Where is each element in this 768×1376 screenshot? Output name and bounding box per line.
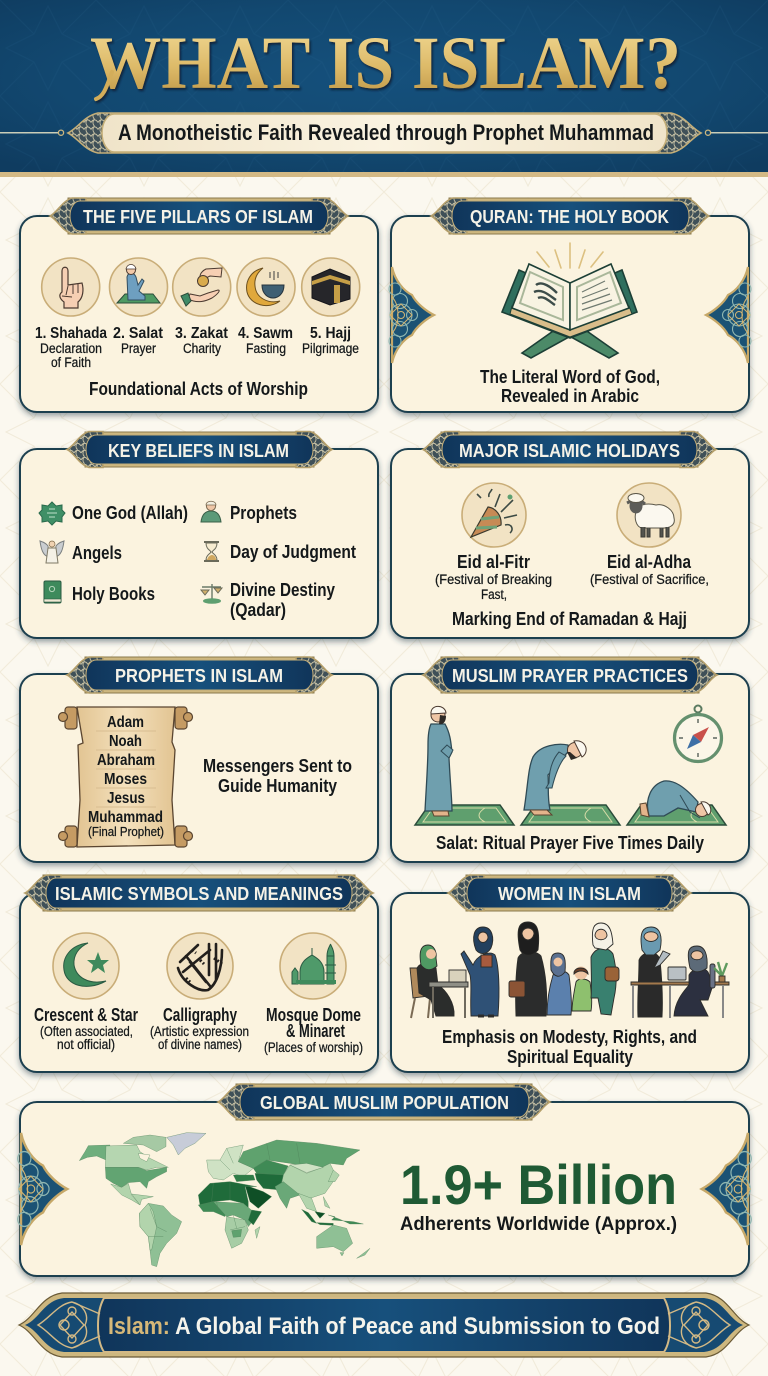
panel card <box>391 674 749 862</box>
holiday labels: Eid al-Adha <box>607 552 692 572</box>
heading: holidays <box>423 432 716 468</box>
icon: zakat hands <box>173 258 231 316</box>
icon: scales <box>201 584 222 604</box>
heading: key beliefs: KEY BELIEFS IN ISLAM <box>108 440 289 461</box>
standing teacher <box>461 927 499 1016</box>
symbol labels: Mosque Dome <box>266 1005 361 1025</box>
belief labels: (Qadar) <box>230 600 286 620</box>
scroll of prophets: Abraham <box>97 752 155 769</box>
women caption: Emphasis on Modesty, Rights, and <box>442 1027 697 1047</box>
icon: salat kneeling man <box>110 258 168 316</box>
holiday labels: (Festival of Sacrifice, <box>590 572 709 587</box>
panel: global population <box>18 1084 751 1276</box>
pillar labels: 1. Shahada <box>35 325 107 342</box>
panel: holidays <box>391 432 749 638</box>
pillar labels: 5. Hajj <box>310 325 351 342</box>
symbol labels: not official) <box>57 1037 115 1052</box>
panel: symbols <box>20 875 378 1072</box>
panel card <box>391 449 749 638</box>
population statistic: Adherents Worldwide (Approx.) <box>400 1214 677 1235</box>
prayer mats <box>415 805 726 825</box>
heading: holidays: MAJOR ISLAMIC HOLIDAYS <box>459 440 680 461</box>
icon: hourglass <box>204 542 219 561</box>
quran caption: Revealed in Arabic <box>501 386 639 406</box>
pillar labels: 2. Salat <box>113 325 164 342</box>
scroll of prophets <box>58 707 192 847</box>
symbol labels: (Often associated, <box>40 1024 133 1039</box>
woman with tablet <box>638 927 670 1017</box>
panel card <box>391 893 749 1072</box>
heading: key beliefs <box>67 432 332 468</box>
desk with seated woman <box>631 946 729 1018</box>
scroll of prophets: Moses <box>104 771 147 788</box>
icon: shahada hand <box>42 258 100 316</box>
pillar labels: Fasting <box>246 341 286 356</box>
belief labels: Divine Destiny <box>230 580 335 600</box>
pillar labels: Pilgrimage <box>302 341 359 356</box>
girl in blue <box>547 953 571 1015</box>
belief labels <box>72 503 356 620</box>
symbol labels: Crescent & Star <box>34 1005 138 1025</box>
icon: party popper <box>462 483 526 547</box>
belief labels: Day of Judgment <box>230 542 356 562</box>
belief labels: Prophets <box>230 503 297 523</box>
header band <box>0 0 768 177</box>
heading: prayer <box>423 657 717 693</box>
population statistic: 1.9+ Billion <box>400 1153 677 1216</box>
icon: hajj kaaba <box>302 258 360 316</box>
heading: population <box>218 1084 550 1120</box>
holiday labels: (Festival of Breaking <box>435 572 552 587</box>
scroll of prophets: Adam <box>107 714 144 731</box>
prophets caption: Guide Humanity <box>218 776 337 796</box>
belief labels: Holy Books <box>72 584 155 604</box>
heading: five pillars <box>50 198 348 234</box>
icon: calligraphy <box>167 933 233 999</box>
heading: women: WOMEN IN ISLAM <box>498 883 641 904</box>
pillar labels: 3. Zakat <box>175 325 229 342</box>
scroll of prophets: Noah <box>109 733 142 750</box>
panel: prophets <box>20 657 378 862</box>
panel: women in islam <box>391 875 749 1072</box>
symbol labels: & Minaret <box>286 1021 345 1041</box>
heading: prophets: PROPHETS IN ISLAM <box>115 665 283 686</box>
icon: compass <box>674 706 722 762</box>
panel card <box>20 449 378 638</box>
symbol labels: Calligraphy <box>163 1005 237 1025</box>
pillar labels: Prayer <box>121 341 156 356</box>
quran caption <box>480 367 660 406</box>
woman in black with case <box>509 922 547 1016</box>
symbol labels <box>34 1005 363 1055</box>
panel card <box>20 893 378 1072</box>
pillar labels: Charity <box>183 341 221 356</box>
holiday labels: Fast, <box>481 587 507 602</box>
small girl in green <box>572 966 592 1011</box>
belief labels: Angels <box>72 543 122 563</box>
heading: women <box>448 875 691 911</box>
panel: quran <box>389 198 751 412</box>
pillar labels <box>35 325 359 370</box>
figure: bowing <box>524 741 586 815</box>
woman in teal <box>591 923 619 1015</box>
quran caption: The Literal Word of God, <box>480 367 660 387</box>
women caption: Spiritual Equality <box>507 1047 633 1067</box>
seated scholar <box>410 945 468 1018</box>
symbol labels: (Artistic expression <box>150 1024 249 1039</box>
pillar labels: of Faith <box>51 355 91 370</box>
women caption <box>442 1027 697 1067</box>
symbol labels: (Places of worship) <box>264 1040 363 1055</box>
icon: sheep <box>617 483 681 547</box>
icon: mosque <box>280 933 346 999</box>
prayer caption: Salat: Ritual Prayer Five Times Daily <box>436 833 704 853</box>
heading: symbols <box>25 875 373 911</box>
icon: one god star <box>39 502 65 525</box>
panel card <box>20 1102 749 1276</box>
icon: open quran on stand <box>502 243 637 358</box>
heading: prayer: MUSLIM PRAYER PRACTICES <box>452 665 688 686</box>
prophets caption <box>203 756 352 796</box>
heading: population: GLOBAL MUSLIM POPULATION <box>260 1092 509 1113</box>
icon: crescent and star <box>53 933 119 999</box>
pillars caption: Foundational Acts of Worship <box>89 379 308 399</box>
prophets caption: Messengers Sent to <box>203 756 352 776</box>
illustration: group of women <box>410 922 729 1018</box>
holiday labels: Eid al-Fitr <box>457 552 530 572</box>
icon: holy book <box>44 581 61 603</box>
panel card <box>391 216 749 412</box>
heading: prophets <box>67 657 332 693</box>
world map <box>79 1133 370 1267</box>
title: WHAT IS ISLAM? <box>90 22 681 105</box>
pillar labels: Declaration <box>40 341 102 356</box>
scroll of prophets: Muhammad <box>88 809 163 826</box>
side ornaments <box>18 1133 751 1245</box>
panel: five pillars <box>20 198 378 412</box>
symbol labels: of divine names) <box>158 1037 242 1052</box>
icon: prophet <box>201 501 221 522</box>
subtitle banner: A Monotheistic Faith Revealed through Prophet Muhammad <box>118 120 654 145</box>
footer banner: Islam: A Global Faith of Peace and Submission to God <box>108 1313 660 1340</box>
scroll of prophets: Jesus <box>107 790 145 807</box>
figure: standing <box>425 706 453 816</box>
heading: quran: QURAN: THE HOLY BOOK <box>470 206 670 227</box>
panel: key beliefs <box>20 432 378 638</box>
scroll of prophets: (Final Prophet) <box>88 825 164 839</box>
panel card <box>20 674 378 862</box>
figure: prostrating <box>640 781 711 818</box>
subtitle banner <box>0 113 768 153</box>
belief labels: One God (Allah) <box>72 503 188 523</box>
panel: prayer practices <box>391 657 749 862</box>
icon: angel <box>40 541 64 563</box>
heading: five pillars: THE FIVE PILLARS OF ISLAM <box>83 206 313 227</box>
icon: sawm crescent and bowl <box>237 258 295 316</box>
heading: quran <box>431 198 709 234</box>
holidays caption: Marking End of Ramadan & Hajj <box>452 609 687 629</box>
side ornaments <box>389 267 751 363</box>
heading: symbols: ISLAMIC SYMBOLS AND MEANINGS <box>55 883 343 904</box>
pillar labels: 4. Sawm <box>238 325 293 342</box>
footer banner <box>19 1293 749 1357</box>
holiday labels <box>435 552 709 602</box>
panel card <box>20 216 378 412</box>
